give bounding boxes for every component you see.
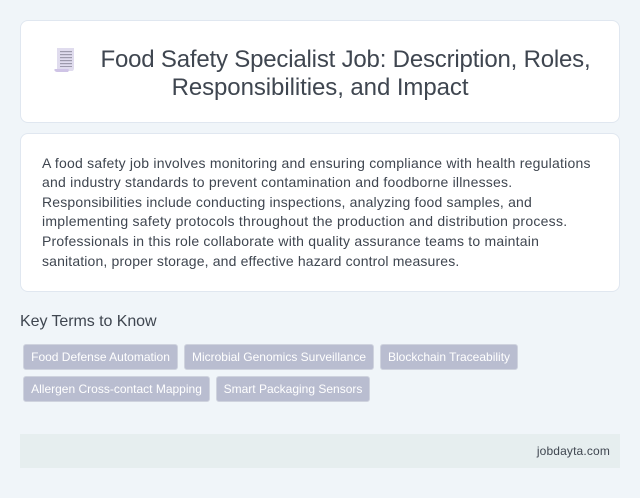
description text: Responsibilities include conducting inspections, analyzing food samples, and: [42, 194, 532, 210]
panel: key term tags: [23, 344, 518, 402]
tag: Blockchain Traceability: [388, 350, 510, 364]
description text: and industry standards to prevent contamination and foodborne illnesses.: [42, 174, 512, 190]
description text: implementing safety protocols throughout the production and distribution process.: [42, 213, 567, 229]
footer text: jobdayta.com: [537, 444, 610, 458]
tag: Smart Packaging Sensors: [224, 382, 362, 396]
description text: Professionals in this role collaborate with quality assurance teams to maintain: [42, 233, 539, 249]
tag: [23, 344, 178, 370]
panel: title card: [20, 20, 620, 123]
tag: [23, 376, 210, 402]
heading: key terms: Key Terms to Know: [20, 313, 157, 330]
description text: A food safety job involves monitoring and ensuring compliance with health regulations: [42, 155, 591, 171]
tag: [380, 344, 518, 370]
tag: Allergen Cross-contact Mapping: [31, 382, 202, 396]
panel: description card: [20, 133, 620, 292]
tag: Microbial Genomics Surveillance: [192, 350, 366, 364]
description text: [42, 155, 591, 269]
tag: [184, 344, 374, 370]
footer bar: [20, 434, 620, 468]
title: Food Safety Specialist Job: Description, Roles,: [100, 46, 590, 73]
tag: Food Defense Automation: [31, 350, 170, 364]
tag: [216, 376, 370, 402]
title: Responsibilities, and Impact: [172, 74, 468, 101]
title: [100, 46, 590, 101]
icon: document receipt: [54, 48, 74, 72]
description text: sanitation, proper storage, and effective hazard control measures.: [42, 253, 459, 269]
